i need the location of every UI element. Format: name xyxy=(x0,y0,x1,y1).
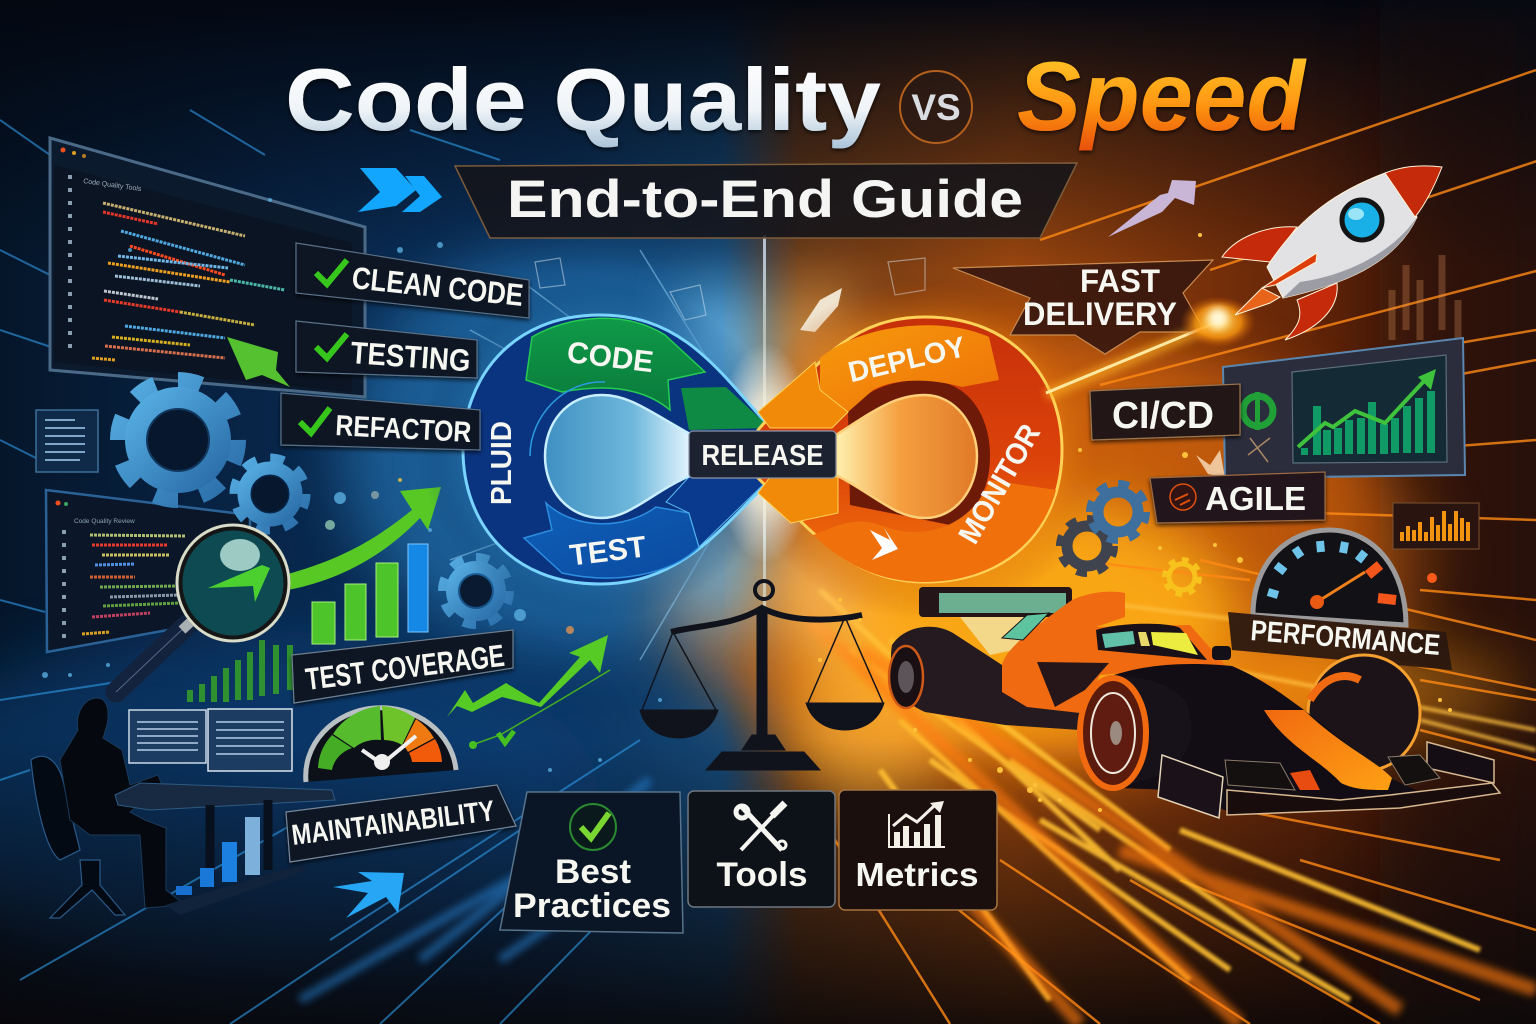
gauge: performance xyxy=(1253,530,1406,625)
rear car wheel xyxy=(889,646,923,708)
person at desk xyxy=(31,698,335,918)
banner: fast delivery: FAST xyxy=(1080,263,1160,299)
icon: magnifying glass xyxy=(116,525,289,692)
vs badge: VS xyxy=(911,87,961,128)
icon: check circle xyxy=(570,804,616,850)
tile: best practices: Best xyxy=(555,853,631,891)
monitor lower arc xyxy=(813,480,1056,582)
tile: metrics: Metrics xyxy=(856,856,978,893)
label: refactor: REFACTOR xyxy=(335,410,472,449)
rear car dark body xyxy=(891,627,1085,730)
faint sketches xyxy=(535,258,925,320)
tile: tools xyxy=(688,791,835,907)
label: ci/cd: CI/CD xyxy=(1112,395,1214,437)
icon: hand fragment xyxy=(1196,450,1225,478)
gears right xyxy=(1061,485,1199,594)
desk xyxy=(115,783,335,810)
monitor left xyxy=(129,710,206,763)
gear blue xyxy=(1091,485,1145,539)
dark inner ring xyxy=(848,380,990,525)
deploy segment: DEPLOY xyxy=(845,331,969,389)
sedan windows xyxy=(1102,631,1198,655)
icon: rocket xyxy=(1222,166,1442,340)
title xyxy=(285,41,1307,151)
gear coverage xyxy=(444,559,508,623)
dashboard panel xyxy=(1223,338,1465,478)
monitor label: MONITOR xyxy=(952,418,1047,550)
label: testing: TESTING xyxy=(350,335,472,378)
left loop base xyxy=(463,315,772,584)
icon: blue arrow bottom xyxy=(333,872,404,918)
lens right xyxy=(836,395,977,518)
desk legs xyxy=(210,800,268,880)
small side panel xyxy=(36,410,98,472)
code segment xyxy=(526,318,770,430)
orange lower segment xyxy=(758,477,838,523)
gauge: maintainability xyxy=(306,706,456,782)
faint bars behind dashboard xyxy=(1392,255,1458,340)
code window: small: Code Quality Review xyxy=(74,518,135,525)
code segment: CODE xyxy=(565,336,655,379)
label: test coverage: TEST COVERAGE xyxy=(304,638,506,697)
orange sedan body xyxy=(1002,592,1225,713)
icon: balance scale xyxy=(640,581,884,770)
code window: large: Code Quality Tools xyxy=(83,178,142,193)
body xyxy=(60,698,185,908)
label: performance: PERFORMANCE xyxy=(1249,615,1441,662)
label: ci/cd xyxy=(1090,384,1240,440)
central light seam xyxy=(680,235,860,650)
label: clean code xyxy=(296,243,529,318)
deploy segment xyxy=(758,325,999,428)
label: test coverage xyxy=(292,630,513,703)
tile: best practices xyxy=(500,792,683,933)
gear medium xyxy=(236,460,304,528)
test segment xyxy=(524,477,770,578)
f1 body xyxy=(1100,664,1420,812)
test segment: TEST xyxy=(568,531,648,573)
code window: small xyxy=(46,490,250,652)
rocket trail xyxy=(1046,296,1256,395)
label: refactor xyxy=(281,393,480,450)
f1 front wheel xyxy=(1080,677,1191,788)
release box xyxy=(689,431,836,478)
release box: RELEASE xyxy=(702,440,824,472)
lens left xyxy=(545,395,692,518)
code window: large xyxy=(50,138,365,397)
tile: metrics xyxy=(839,790,997,910)
gear dark xyxy=(1061,520,1113,572)
sparks xyxy=(818,233,1452,812)
label: testing xyxy=(296,321,477,378)
icon: green zigzag arrow xyxy=(447,635,610,749)
label: maintainability: MAINTAINABILITY xyxy=(290,795,496,852)
monitor right xyxy=(208,709,292,771)
subtitle banner xyxy=(455,163,1077,238)
infinity loop xyxy=(420,280,1110,620)
right pan xyxy=(806,617,884,730)
sedan vent xyxy=(1037,662,1109,707)
build label: PLUID xyxy=(486,421,518,505)
icon: lilac arrow xyxy=(1108,180,1196,237)
banner: fast delivery: DELIVERY xyxy=(1023,296,1177,332)
icon: wrench and screwdriver xyxy=(736,803,786,850)
dashboard bars xyxy=(1301,391,1435,455)
sedan windscreen xyxy=(1002,613,1049,640)
title: Speed: Speed xyxy=(1017,41,1307,151)
dashboard ring icon xyxy=(1243,392,1273,462)
left pan xyxy=(640,632,718,738)
icon: white arrow fragment xyxy=(800,288,842,332)
label: clean code: CLEAN CODE xyxy=(350,260,525,313)
gear large xyxy=(120,382,236,498)
small orange bar chart xyxy=(1393,503,1479,549)
chair xyxy=(31,756,125,918)
right loop base xyxy=(758,317,1062,582)
loop glow xyxy=(420,280,1110,620)
sedan roof xyxy=(1096,624,1207,660)
f1 rear wheel xyxy=(1308,655,1420,771)
label: agile: AGILE xyxy=(1205,480,1306,517)
chart: test coverage bars xyxy=(312,544,428,644)
icon: green paper arrow xyxy=(227,337,290,387)
white arrow on loop xyxy=(870,528,898,560)
icon: rising green arrow xyxy=(284,487,441,590)
desk bars xyxy=(176,817,260,895)
sedan mirror xyxy=(1212,646,1231,660)
particles blue side xyxy=(42,198,662,772)
tile: best practices: Practices xyxy=(513,887,671,925)
faint green histogram xyxy=(190,640,290,702)
f1 floor and front wing xyxy=(1158,742,1500,818)
subtitle banner: End-to-End Guide xyxy=(507,170,1023,229)
gear yellow xyxy=(1165,560,1199,594)
title: Code Quality: Code Quality xyxy=(285,50,881,149)
banner: fast delivery xyxy=(953,260,1213,354)
label: agile xyxy=(1150,472,1325,523)
icon: metrics chart xyxy=(889,801,945,847)
vs badge xyxy=(900,71,972,143)
rear wing xyxy=(919,587,1072,655)
icon: blue chevron arrow xyxy=(358,168,442,212)
lens left outer ring xyxy=(530,382,605,456)
f1 orange nose xyxy=(1264,710,1392,790)
dashboard trend arrow xyxy=(1298,380,1425,447)
race cars xyxy=(889,587,1500,818)
tile: tools: Tools xyxy=(716,856,808,894)
